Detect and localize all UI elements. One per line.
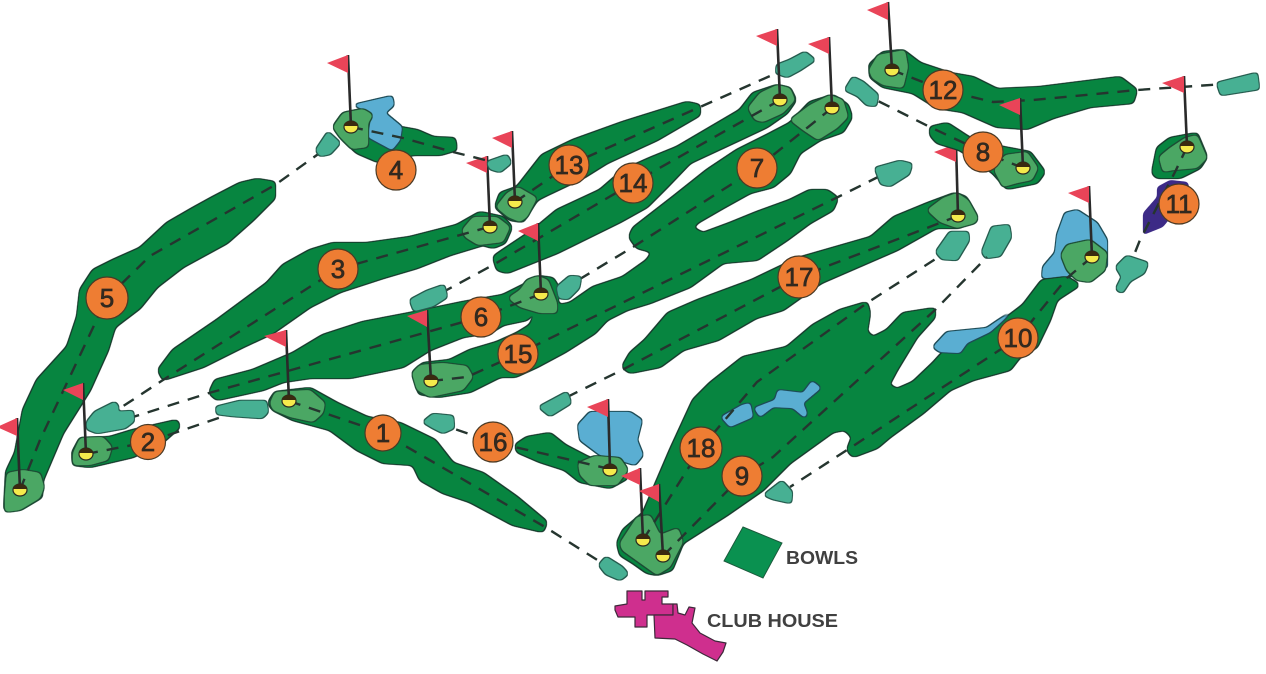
- fairways: holes 6, 7 and 15: [209, 95, 852, 400]
- hole 5: 5: [100, 283, 114, 313]
- flag: hole 10: [1068, 186, 1099, 263]
- hole 1: 1: [376, 418, 390, 448]
- hole 7: 7: [750, 153, 764, 183]
- hole 16: [423, 399, 643, 488]
- badge: 10: [998, 318, 1038, 358]
- hole 15: [407, 161, 912, 397]
- hole 2: [63, 383, 268, 467]
- badge: 10: 10: [1004, 323, 1032, 353]
- fairway: 9, 10 and 18: [617, 277, 1080, 575]
- hole 4: 4: [389, 155, 403, 185]
- water behind green 10: [1042, 210, 1107, 278]
- hole 14: 14: [619, 168, 647, 198]
- badge: 9: 9: [735, 461, 749, 491]
- hole 14: [410, 29, 796, 311]
- hole 8: [845, 77, 1045, 189]
- hole 4: [327, 55, 511, 190]
- hole 6: [87, 223, 557, 433]
- hole 13: [492, 52, 815, 222]
- hole 12: 12: [929, 75, 957, 105]
- bowls green: [724, 527, 858, 578]
- bowls green: BOWLS: [786, 548, 858, 568]
- water hazards: [721, 282, 1042, 427]
- hole 3: [105, 156, 512, 418]
- flag: hole 9: [639, 484, 670, 562]
- badge: 18: [680, 427, 722, 469]
- badge: 9: [722, 456, 762, 496]
- hole 13: 13: [555, 150, 583, 180]
- hole 5: [0, 132, 340, 512]
- tees: [764, 225, 1011, 503]
- hole 7: [557, 37, 848, 299]
- hole 17: 17: [785, 262, 813, 292]
- badge: 18: 18: [687, 433, 715, 463]
- hole 17: [539, 144, 978, 416]
- hole 12: [867, 2, 1259, 129]
- hole 16: 16: [479, 427, 507, 457]
- club house: CLUB HOUSE: [707, 611, 838, 631]
- dashed lines: [643, 257, 1092, 556]
- hole 11: [1116, 76, 1207, 293]
- flag: hole 18: [621, 468, 650, 546]
- club house: [615, 591, 838, 661]
- hole 6: 6: [474, 302, 488, 332]
- hole 2: 2: [141, 427, 155, 457]
- hole 3: 3: [331, 254, 345, 284]
- holes 9, 10 and 18: [617, 186, 1107, 575]
- greens: [620, 240, 1107, 575]
- hole 8: 8: [976, 137, 990, 167]
- hole 15: 15: [504, 339, 532, 369]
- hole 11: 11: [1166, 189, 1192, 219]
- hole 1: [264, 330, 628, 580]
